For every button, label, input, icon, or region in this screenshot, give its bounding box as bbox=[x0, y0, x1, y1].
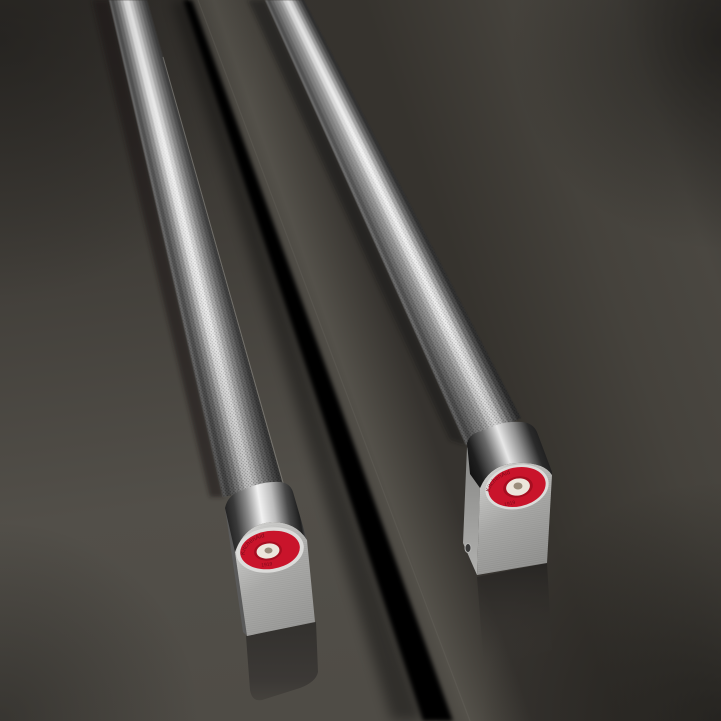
right bar lower shading bbox=[265, 0, 521, 445]
right mount side face bbox=[463, 447, 480, 575]
left mount edge bbox=[225, 508, 247, 636]
left bar lower shading bbox=[109, 0, 283, 497]
right door panel bbox=[188, 0, 721, 721]
right collar bbox=[467, 422, 552, 488]
right red cap bbox=[486, 464, 549, 510]
right bar knurling bbox=[348, 138, 520, 443]
left bar rim light bbox=[163, 57, 284, 486]
left handle reflection on door bbox=[246, 622, 318, 700]
right cap lettering: KitchenAid bbox=[486, 470, 510, 492]
right handle bar bbox=[265, 0, 521, 445]
left door panel bbox=[0, 0, 438, 721]
left bar knurling bbox=[154, 136, 281, 496]
left red cap bbox=[236, 527, 304, 573]
right mount plate bbox=[477, 463, 552, 575]
left plate brushing bbox=[235, 522, 315, 636]
right handle reflection on door bbox=[477, 563, 552, 668]
door gap: black seam between doors bbox=[172, 0, 470, 721]
left mount plate bbox=[235, 522, 315, 636]
right mount screw bbox=[465, 544, 471, 552]
left handle bar bbox=[109, 0, 284, 497]
left handle shadow on door bbox=[92, 0, 224, 497]
left cap year: 1919 bbox=[261, 561, 273, 569]
right cap year: 1919 bbox=[504, 500, 516, 508]
left collar bbox=[225, 482, 307, 552]
right plate brushing bbox=[477, 463, 552, 575]
right handle shadow on door bbox=[248, 0, 466, 445]
left handle mount bbox=[225, 482, 315, 636]
right handle mount bbox=[463, 422, 552, 575]
left cap lettering: KitchenAid bbox=[240, 533, 264, 555]
